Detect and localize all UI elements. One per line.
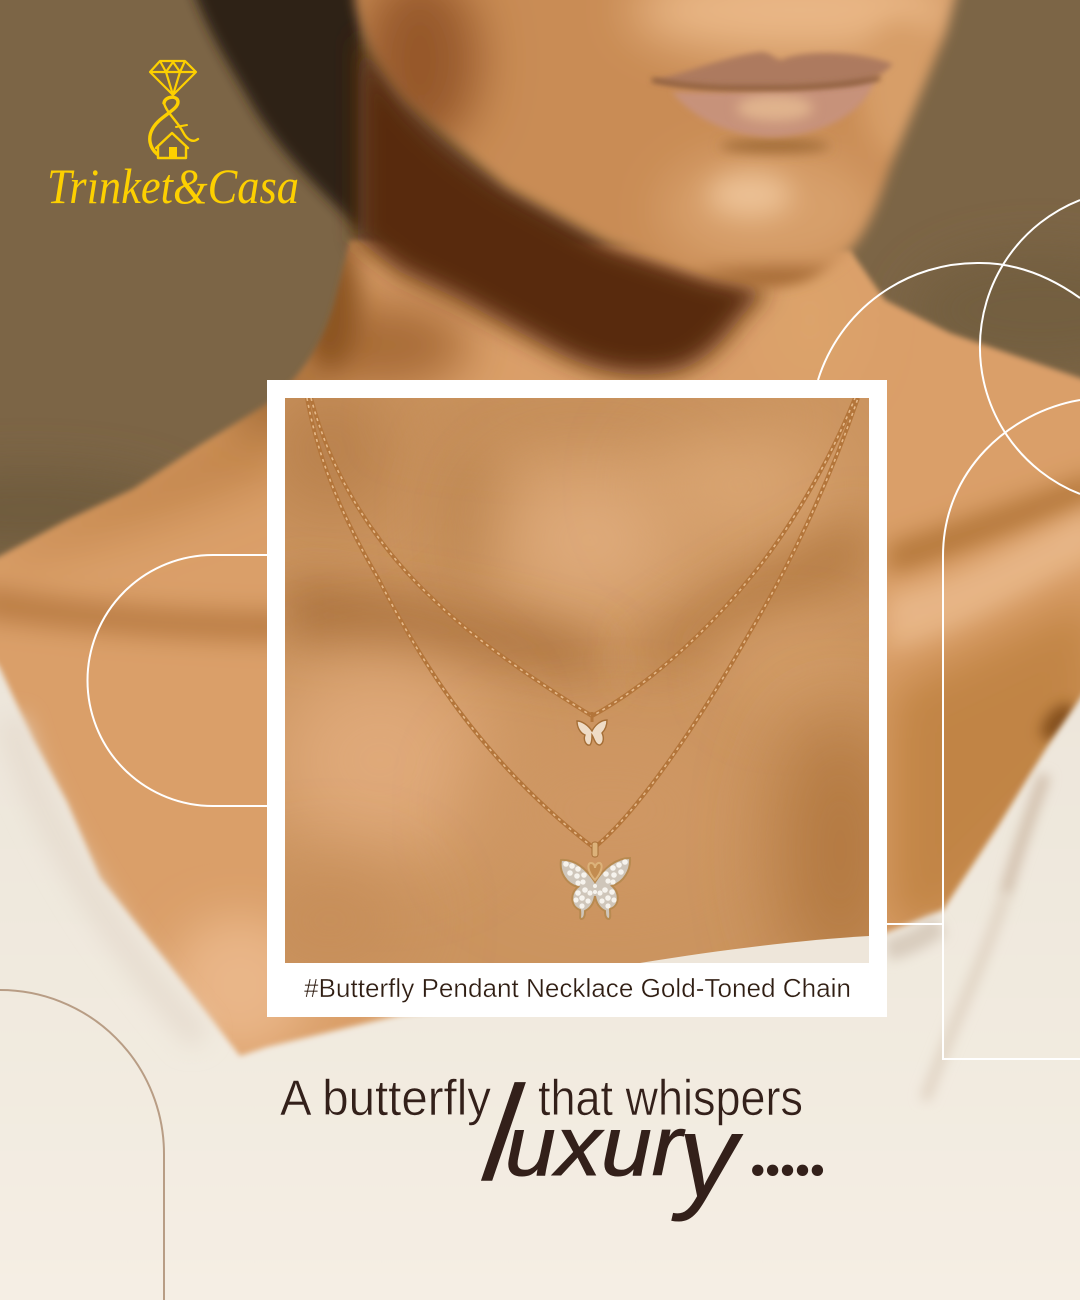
headline (280, 1058, 824, 1223)
card frame (267, 380, 887, 1017)
decorative arc: right tall arch (887, 400, 1080, 1059)
headline: script word: uxur (505, 1099, 685, 1193)
chain: upper strand (307, 398, 858, 848)
cloth (0, 640, 1080, 1300)
headline: script word (475, 1058, 744, 1223)
decorative arc: bottom left arch (0, 990, 164, 1300)
logo wordmark: Trinket&Casa (47, 158, 299, 214)
cloth folds (10, 720, 1045, 1100)
face (340, 0, 980, 300)
icon: diamond (150, 61, 196, 95)
decorative arc: right circle (980, 200, 1080, 494)
decorative arc: left semicircle (88, 555, 267, 806)
headline: script word: y (671, 1090, 744, 1223)
hair shadow (190, 0, 362, 235)
pendant: large butterfly (561, 842, 630, 919)
icon: ampersand and house (150, 97, 198, 158)
shoulders and chest (0, 230, 1080, 1110)
lips (652, 52, 893, 153)
caption: #Butterfly Pendant Necklace Gold-Toned Chain (304, 973, 851, 1003)
cloth edge (640, 936, 869, 963)
necklace photo (285, 398, 869, 963)
photo card (250, 380, 900, 1017)
headline: second part: that whispers (538, 1070, 803, 1126)
logo: Trinket&Casa (47, 61, 299, 214)
pendant: small butterfly (577, 712, 607, 745)
decorative arc: top right arch (818, 263, 1080, 380)
headline: trailing dots: ..... (749, 1114, 824, 1191)
neck shadow (358, 30, 768, 375)
chain: lower strand (307, 398, 858, 848)
headline: script word: l (475, 1058, 530, 1209)
headline: first part: A butterfly (280, 1070, 491, 1126)
